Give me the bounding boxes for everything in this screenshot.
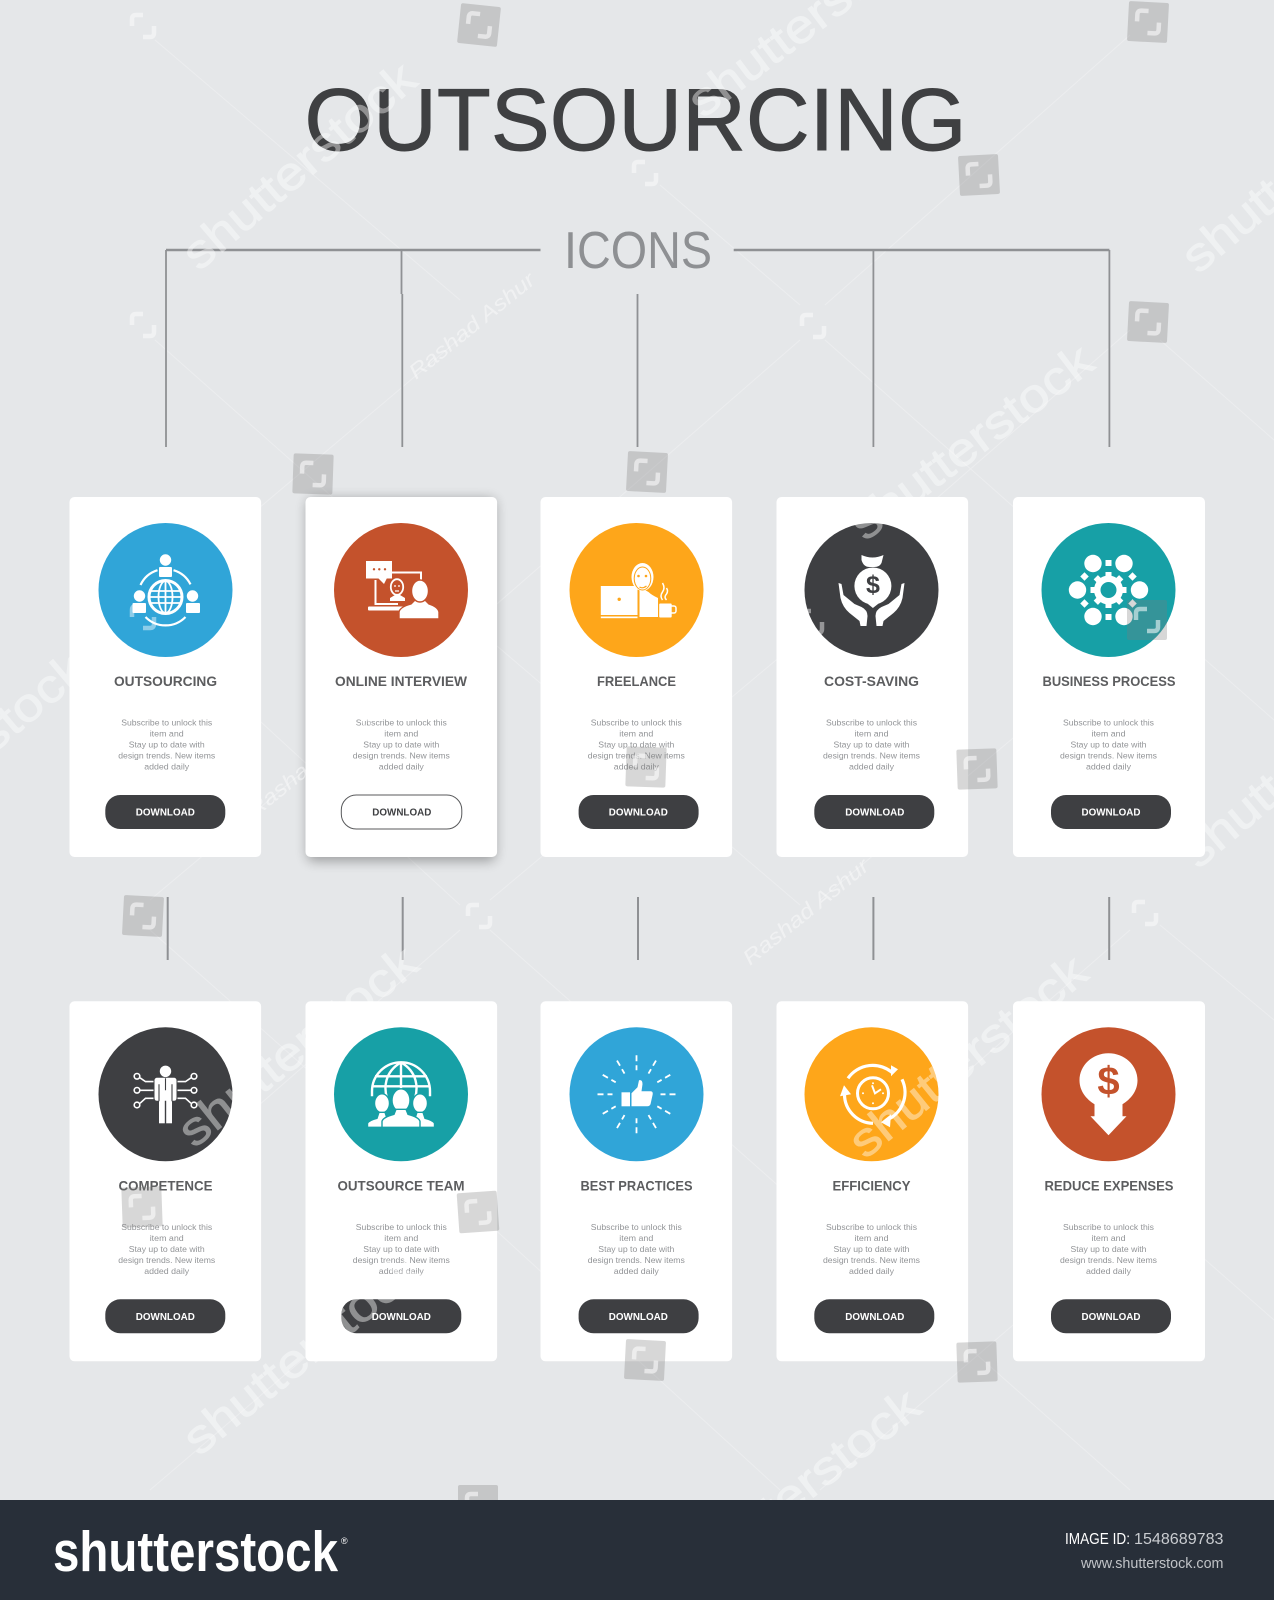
body text: added daily xyxy=(1086,762,1132,772)
heading: OUTSOURCING xyxy=(114,673,217,689)
body text: design trends. New items xyxy=(353,751,450,761)
body text: design trends. New items xyxy=(118,751,215,761)
button: DOWNLOAD xyxy=(136,1311,195,1323)
watermarks: shutterstock xyxy=(838,944,1097,1168)
body text: Stay up to date with xyxy=(1070,740,1147,750)
watermarks: shutterstock xyxy=(171,51,426,280)
button xyxy=(814,795,934,829)
body text: design trends. New items xyxy=(823,1255,920,1265)
icon: money bag in hands xyxy=(838,555,904,626)
footer logo: shutterstock xyxy=(53,1520,338,1584)
heading: EFFICIENCY xyxy=(832,1177,911,1193)
card: online interview xyxy=(306,497,497,861)
icon: online interview xyxy=(366,561,439,619)
card: efficiency xyxy=(776,1001,968,1361)
button: DOWNLOAD xyxy=(609,1311,668,1323)
body text xyxy=(118,1222,215,1276)
body text: Subscribe to unlock this xyxy=(591,718,682,728)
watermarks: Rashad Ashur xyxy=(244,706,380,822)
body text: added daily xyxy=(614,1266,660,1276)
body text: Subscribe to unlock this xyxy=(826,1222,917,1232)
body text: design trends. New items xyxy=(1060,1255,1157,1265)
watermarks: shutterstock xyxy=(167,934,428,1157)
body text: added daily xyxy=(379,762,425,772)
button: DOWNLOAD xyxy=(372,1311,431,1323)
body text: added daily xyxy=(144,762,190,772)
button xyxy=(579,1299,699,1333)
registered mark: ® xyxy=(341,1536,348,1546)
image id number: 1548689783 xyxy=(1134,1531,1224,1548)
body text: Subscribe to unlock this xyxy=(121,718,212,728)
body text: item and xyxy=(384,1233,419,1243)
body text: Stay up to date with xyxy=(129,1244,205,1254)
website url: www.shutterstock.com xyxy=(1080,1555,1224,1572)
body text: Subscribe to unlock this xyxy=(1063,1222,1154,1232)
body text: design trends. New items xyxy=(1060,751,1157,761)
button xyxy=(105,795,225,829)
icon: person with skill nodes xyxy=(134,1066,197,1123)
button xyxy=(579,795,699,829)
image id label: IMAGE ID: xyxy=(1065,1531,1130,1548)
heading: ONLINE INTERVIEW xyxy=(335,673,468,689)
button: outlined: DOWNLOAD xyxy=(372,806,432,818)
heading: OUTSOURCE TEAM xyxy=(337,1177,464,1193)
watermarks: Rashad Ashur xyxy=(739,854,875,970)
body text: item and xyxy=(854,1233,889,1243)
body text: added daily xyxy=(144,1266,190,1276)
body text: Stay up to date with xyxy=(363,740,440,750)
body text xyxy=(353,1222,450,1276)
body text xyxy=(1060,1222,1157,1276)
button xyxy=(814,1299,934,1333)
body text: Stay up to date with xyxy=(1070,1244,1147,1254)
body text xyxy=(588,1222,685,1276)
icon: gear and nodes xyxy=(1069,555,1148,625)
icon: outsourcing globe and people xyxy=(132,554,200,625)
title: OUTSOURCING xyxy=(304,70,966,169)
subtitle: icons: ICONS xyxy=(564,222,712,280)
button xyxy=(105,1299,225,1333)
body text xyxy=(1060,718,1157,772)
card: competence xyxy=(70,1001,261,1361)
body text: item and xyxy=(384,729,419,739)
button xyxy=(1051,795,1171,829)
body text: design trends. New items xyxy=(353,1255,450,1265)
body text: Subscribe to unlock this xyxy=(356,718,447,728)
icon: clock with circular arrows xyxy=(840,1065,905,1127)
body text xyxy=(823,718,920,772)
body text: Subscribe to unlock this xyxy=(591,1222,682,1232)
body text xyxy=(588,718,685,772)
connector lines: between rows xyxy=(168,897,1109,960)
body text: item and xyxy=(619,1233,654,1243)
icon: freelance xyxy=(601,563,676,618)
body text: Subscribe to unlock this xyxy=(1063,718,1154,728)
body text: added daily xyxy=(379,1266,425,1276)
button xyxy=(341,1299,461,1333)
button: DOWNLOAD xyxy=(136,806,195,818)
card: reduce expenses xyxy=(1013,1001,1205,1361)
body text: Stay up to date with xyxy=(598,1244,675,1254)
body text: Subscribe to unlock this xyxy=(356,1222,447,1232)
body text: item and xyxy=(854,729,889,739)
card: cost-saving xyxy=(776,497,968,857)
card: business process xyxy=(1013,497,1205,857)
body text: added daily xyxy=(849,1266,895,1276)
body text: design trends. New items xyxy=(588,1255,685,1265)
body text xyxy=(118,718,215,772)
footer bar xyxy=(0,1500,1274,1600)
body text: item and xyxy=(1092,1233,1126,1243)
body text: added daily xyxy=(1086,1266,1132,1276)
heading: BUSINESS PROCESS xyxy=(1042,673,1176,689)
body text: Stay up to date with xyxy=(598,740,675,750)
card: outsourcing xyxy=(70,497,261,857)
body text xyxy=(823,1222,920,1276)
body text: item and xyxy=(150,1233,184,1243)
body text: Stay up to date with xyxy=(363,1244,440,1254)
heading: COMPETENCE xyxy=(119,1177,213,1193)
body text: added daily xyxy=(849,762,895,772)
card: outsource team xyxy=(306,1001,497,1361)
body text: item and xyxy=(1092,729,1126,739)
body text: Subscribe to unlock this xyxy=(826,718,917,728)
body text: item and xyxy=(150,729,184,739)
button: DOWNLOAD xyxy=(845,1311,905,1323)
icon: dollar pin with down arrow: $ xyxy=(1097,1059,1120,1103)
button: DOWNLOAD xyxy=(1082,1311,1141,1323)
button: DOWNLOAD xyxy=(845,806,905,818)
icon: thumbs up with rays xyxy=(598,1055,676,1133)
card: best practices xyxy=(540,1001,732,1361)
watermarks: shutterstock xyxy=(172,1241,431,1465)
body text: Stay up to date with xyxy=(129,740,205,750)
body text: Stay up to date with xyxy=(833,740,910,750)
heading: REDUCE EXPENSES xyxy=(1044,1177,1174,1193)
button: outlined xyxy=(341,795,462,829)
watermarks: Rashad Ashur xyxy=(405,268,541,384)
button: DOWNLOAD xyxy=(1082,806,1141,818)
heading: FREELANCE xyxy=(597,673,676,689)
icon: money bag in hands: $ xyxy=(866,571,880,599)
body text: Stay up to date with xyxy=(833,1244,910,1254)
connector tree: top row xyxy=(166,250,1109,447)
icon: team and globe xyxy=(368,1062,434,1127)
button xyxy=(1051,1299,1171,1333)
body text: Subscribe to unlock this xyxy=(121,1222,212,1232)
body text: design trends. New items xyxy=(823,751,920,761)
watermarks: shutterstock xyxy=(669,1377,930,1598)
body text xyxy=(353,718,450,772)
button: DOWNLOAD xyxy=(609,806,668,818)
heading: BEST PRACTICES xyxy=(580,1177,692,1193)
card: freelance xyxy=(540,497,732,857)
watermarks: shutterstock xyxy=(839,333,1103,550)
heading: COST-SAVING xyxy=(824,673,919,689)
body text: added daily xyxy=(614,762,660,772)
icon: dollar pin with down arrow xyxy=(1080,1053,1138,1135)
body text: item and xyxy=(619,729,654,739)
body text: design trends. New items xyxy=(588,751,685,761)
body text: design trends. New items xyxy=(118,1255,215,1265)
